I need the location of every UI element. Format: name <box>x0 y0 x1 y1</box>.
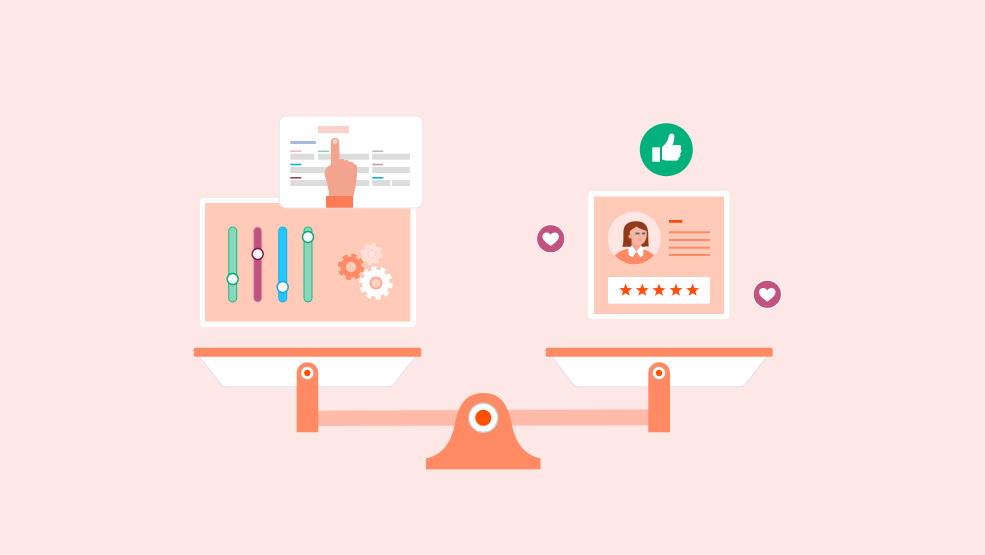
right scale pan <box>546 348 773 387</box>
left hanger post <box>297 362 318 432</box>
icon: pointing hand <box>325 138 357 208</box>
avatar: woman portrait <box>608 212 661 265</box>
review text lines <box>669 231 710 256</box>
document heading bar <box>318 126 349 133</box>
right hanger post <box>648 362 670 432</box>
document subheading bar <box>290 141 316 144</box>
icon: pale gear <box>362 244 382 264</box>
review title dash <box>669 220 682 223</box>
slider 4 <box>302 227 314 302</box>
scale base with pivot <box>426 393 540 469</box>
slider 2 <box>252 227 263 302</box>
panel: controls <box>200 198 416 327</box>
icon: heart badge right <box>753 280 781 308</box>
left scale pan <box>194 348 421 387</box>
panel: review card <box>588 191 730 319</box>
document table rows <box>290 150 410 186</box>
icon: white gear <box>361 268 391 298</box>
slider 3 <box>277 227 288 302</box>
icon: orange gear <box>339 255 363 279</box>
icon: thumbs up badge <box>640 123 693 176</box>
balance scale illustration <box>194 116 782 470</box>
scale beam <box>316 409 650 426</box>
slider 1 <box>227 227 238 302</box>
icon: heart badge left <box>537 225 565 253</box>
star rating <box>608 277 710 304</box>
panel: document card <box>279 116 423 208</box>
